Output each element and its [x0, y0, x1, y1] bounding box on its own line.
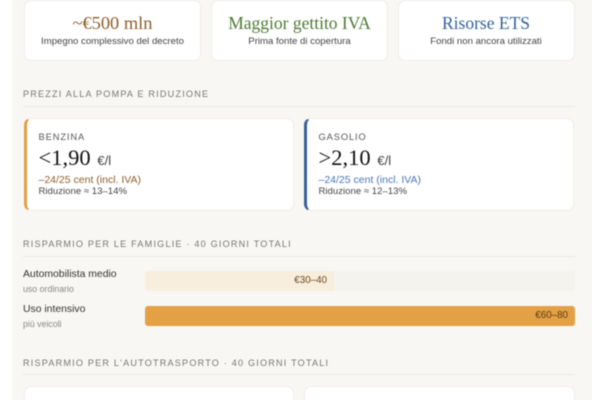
panel: diesel price: GASOLIO	[318, 132, 367, 142]
heading: pump prices: PREZZI ALLA POMPA E RIDUZIONE	[23, 89, 209, 99]
sublabel: ordinary use: uso ordinario	[23, 284, 74, 294]
stat card: total commitment: ~€500 mln	[73, 13, 152, 33]
heading: haulage savings: RISPARMIO PER L'AUTOTRASPORTO · 40 GIORNI TOTALI	[23, 358, 329, 368]
panel: petrol price: BENZINA	[38, 132, 85, 142]
panel: diesel price	[304, 118, 574, 211]
stat card: VAT revenue: Prima fonte di copertura	[248, 36, 351, 47]
sublabel: multiple vehicles: più veicoli	[23, 319, 62, 329]
panel: petrol price	[24, 118, 294, 211]
panel: diesel price: >2,10 €/l	[318, 145, 391, 170]
bar: intensive use savings	[145, 306, 575, 326]
panel: haulage card right	[304, 386, 574, 400]
bar: intensive use savings: €60–80	[535, 310, 568, 321]
stat card: VAT revenue	[211, 0, 388, 61]
stat card: total commitment: Impegno complessivo del decreto	[41, 36, 184, 47]
stat card: ETS resources: Risorse ETS	[442, 13, 530, 33]
stat card: total commitment	[24, 0, 201, 61]
panel: diesel price: Riduzione ≈ 12–13%	[318, 186, 407, 197]
heading: pump prices	[23, 88, 575, 107]
stat card: VAT revenue: Maggior gettito IVA	[228, 13, 371, 33]
bar: average motorist savings	[145, 270, 575, 290]
panel: petrol price: Riduzione ≈ 13–14%	[38, 186, 127, 197]
label: average motorist: Automobilista medio	[23, 268, 117, 280]
stat card: ETS resources: Fondi non ancora utilizzati	[430, 36, 542, 47]
panel: petrol price: <1,90 €/l	[38, 145, 111, 170]
panel: petrol price: –24/25 cent (incl. IVA)	[38, 174, 141, 186]
panel: haulage card left	[24, 386, 294, 400]
panel: diesel price: –24/25 cent (incl. IVA)	[318, 174, 421, 186]
stat card: ETS resources	[398, 0, 574, 61]
bar: average motorist savings: €30–40	[294, 274, 327, 286]
heading: haulage savings	[23, 357, 575, 375]
heading: family savings	[23, 238, 575, 257]
label: intensive use: Uso intensivo	[23, 304, 85, 315]
heading: family savings: RISPARMIO PER LE FAMIGLIE · 40 GIORNI TOTALI	[23, 239, 292, 249]
